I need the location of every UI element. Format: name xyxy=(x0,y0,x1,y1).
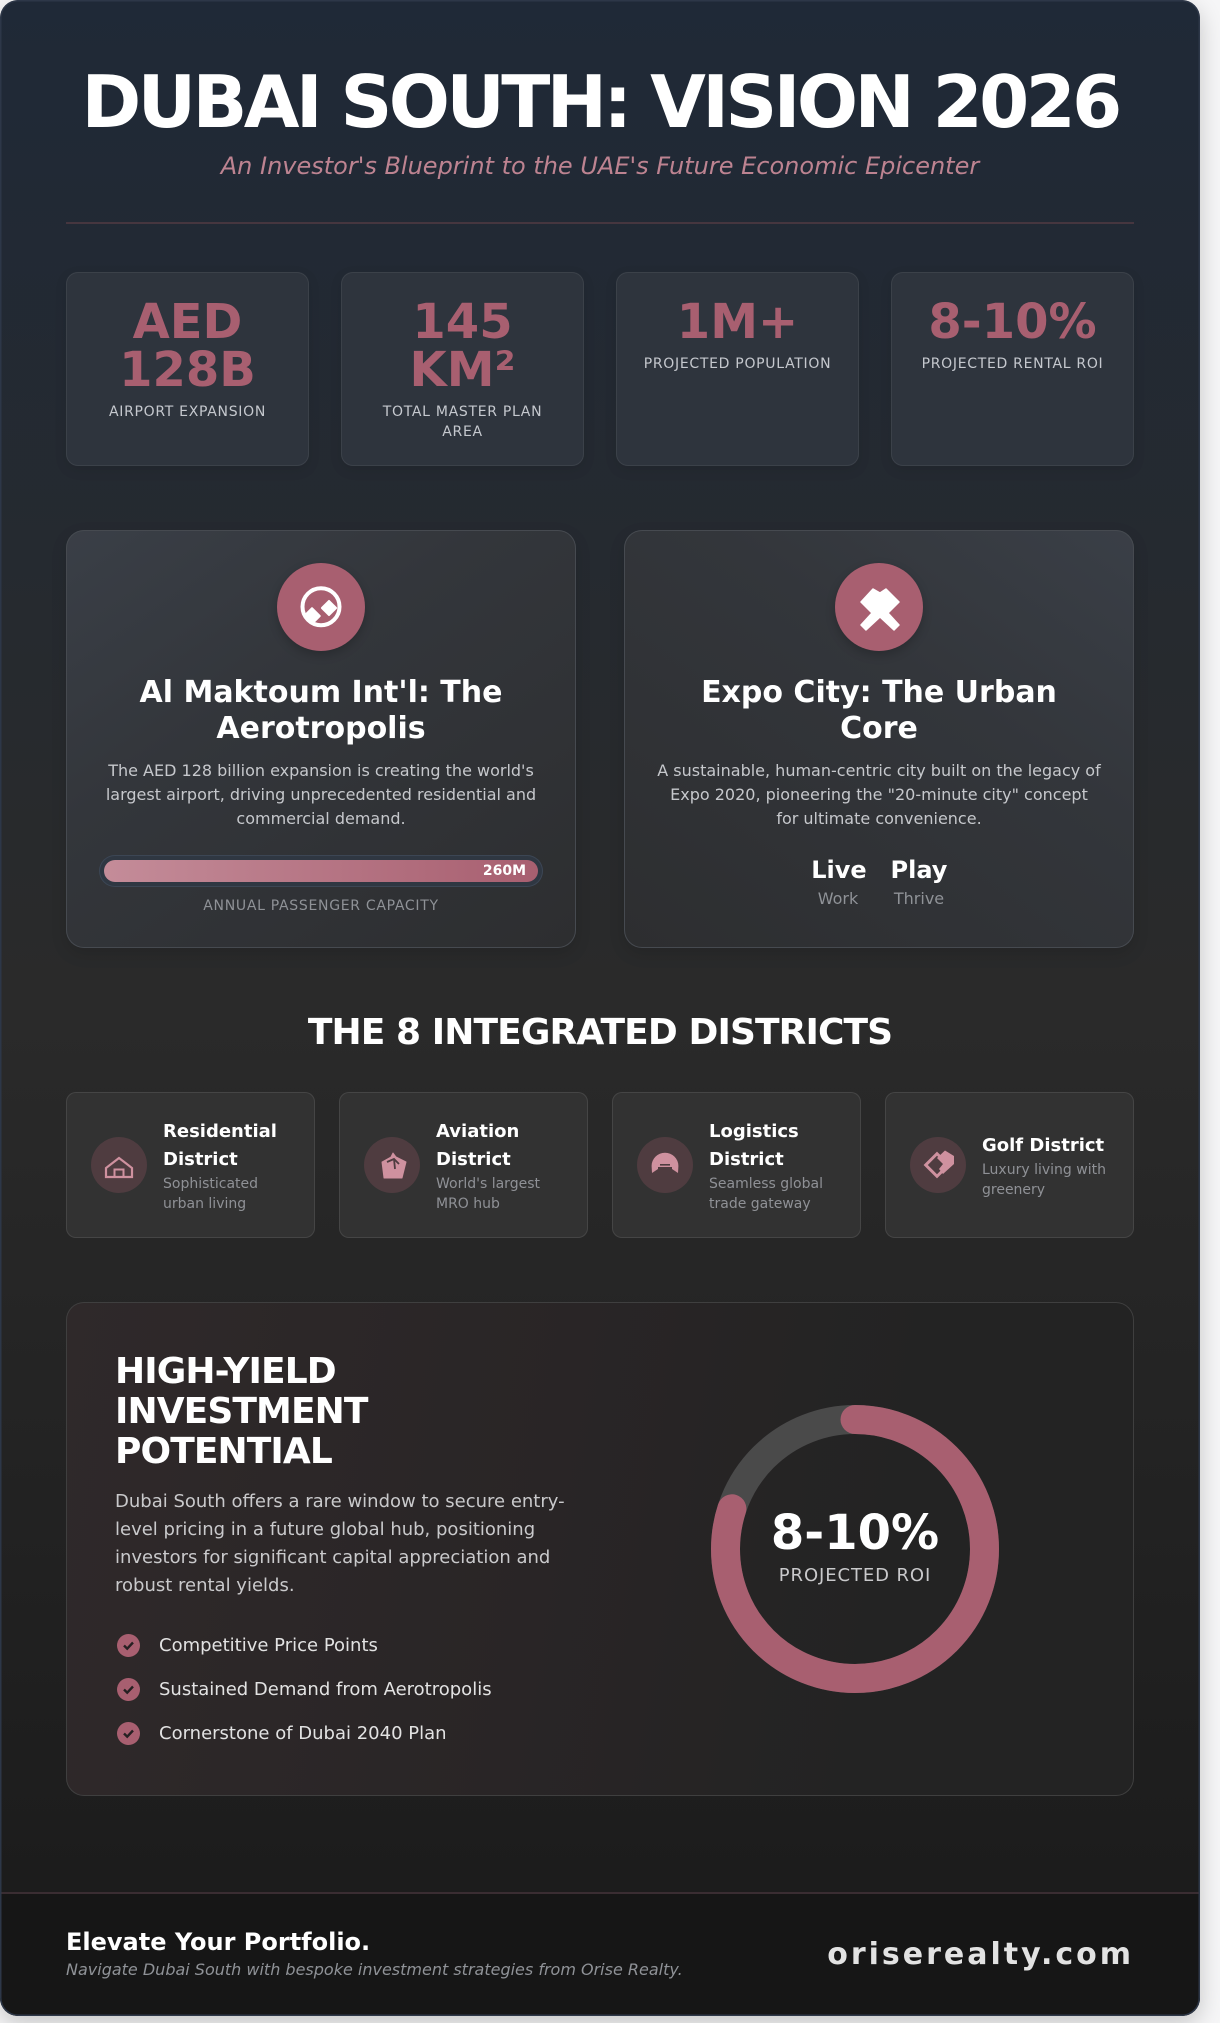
district card: residential: urban living xyxy=(163,1196,246,1212)
benefit: price points: Competitive Price Points xyxy=(159,1635,378,1656)
description xyxy=(657,761,1102,828)
stat card: airport expansion: 128B xyxy=(119,342,256,398)
description: Expo 2020, pioneering the "20-minute city" concept xyxy=(670,785,1088,804)
district card: residential xyxy=(66,1092,315,1238)
heading xyxy=(701,675,1057,746)
heading xyxy=(115,1351,368,1472)
district card: logistics: trade gateway xyxy=(709,1196,811,1212)
donut chart: projected ROI: PROJECTED ROI xyxy=(779,1565,931,1586)
stat card: master plan area: TOTAL MASTER PLAN xyxy=(383,404,542,420)
description: level pricing in a future global hub, positioning xyxy=(115,1519,535,1540)
stat card: master plan area: AREA xyxy=(442,424,483,440)
panel: investment potential xyxy=(66,1302,1134,1796)
description: A sustainable, human-centric city built on the legacy of xyxy=(657,761,1101,780)
stat card: master plan area: 145 xyxy=(412,294,513,350)
icon: house xyxy=(91,1137,147,1193)
district card: logistics: Seamless global xyxy=(709,1176,823,1192)
heading xyxy=(140,675,502,746)
call to action: Elevate Your Portfolio. xyxy=(66,1928,370,1956)
play and thrive: Play xyxy=(891,856,947,884)
tagline: Navigate Dubai South with bespoke investment strategies from Orise Realty. xyxy=(66,1960,683,1979)
description: investors for significant capital appreciation and xyxy=(115,1547,550,1568)
district card: logistics: Logistics xyxy=(709,1121,799,1142)
description: for ultimate convenience. xyxy=(776,809,982,828)
icon: crossed tools xyxy=(835,563,923,651)
heading: Aerotropolis xyxy=(216,711,426,746)
live and work xyxy=(811,856,867,908)
live and work: Live xyxy=(811,856,867,884)
icon: logistics xyxy=(637,1137,693,1193)
stat card: master plan area xyxy=(341,272,584,466)
district card: aviation: MRO hub xyxy=(436,1196,500,1212)
bar label: ANNUAL PASSENGER CAPACITY xyxy=(203,898,439,914)
district card: aviation: District xyxy=(436,1149,511,1170)
district card: golf xyxy=(885,1092,1134,1238)
description: largest airport, driving unprecedented residential and xyxy=(106,785,536,804)
heading: POTENTIAL xyxy=(115,1431,332,1472)
section heading: districts: THE 8 INTEGRATED DISTRICTS xyxy=(308,1012,892,1053)
stat card: rental ROI: 8-10% xyxy=(928,294,1097,350)
icon: aviation xyxy=(364,1137,420,1193)
district card: aviation: Aviation xyxy=(436,1121,519,1142)
panel: Al Maktoum airport xyxy=(66,530,576,948)
district card: logistics xyxy=(612,1092,861,1238)
heading: Expo City: The Urban xyxy=(701,675,1057,710)
panel: Expo City xyxy=(624,530,1134,948)
district card: aviation: World's largest xyxy=(436,1176,540,1192)
district card: golf: Golf District xyxy=(982,1135,1104,1156)
play and thrive: Thrive xyxy=(894,889,944,908)
capacity progress bar xyxy=(99,855,543,887)
district card: residential: Sophisticated xyxy=(163,1176,258,1192)
stat card: population: PROJECTED POPULATION xyxy=(644,356,831,372)
heading: Core xyxy=(840,711,918,746)
district card: residential: District xyxy=(163,1149,238,1170)
heading: INVESTMENT xyxy=(115,1391,368,1432)
district card: residential: Residential xyxy=(163,1121,277,1142)
stat card: airport expansion: AIRPORT EXPANSION xyxy=(109,404,266,420)
district card: aviation xyxy=(339,1092,588,1238)
footer xyxy=(0,1892,1200,2016)
title: DUBAI SOUTH: VISION 2026 xyxy=(81,60,1119,144)
heading: HIGH-YIELD xyxy=(115,1351,336,1392)
stat card: population xyxy=(616,272,859,466)
stat card: airport expansion: AED xyxy=(133,294,242,350)
description: robust rental yields. xyxy=(115,1575,295,1596)
description xyxy=(106,761,536,828)
stat card: rental ROI xyxy=(891,272,1134,466)
stat card: population: 1M+ xyxy=(677,294,798,350)
capacity progress bar: 260M xyxy=(483,863,526,879)
district card: golf: Luxury living with xyxy=(982,1162,1106,1178)
donut chart: projected ROI: 8-10% xyxy=(771,1505,939,1561)
benefit: dubai 2040 plan: Cornerstone of Dubai 2040 Plan xyxy=(159,1723,447,1744)
subtitle: An Investor's Blueprint to the UAE's Future Economic Epicenter xyxy=(221,152,979,180)
description: The AED 128 billion expansion is creating the world's xyxy=(108,761,534,780)
live and work: Work xyxy=(818,889,858,908)
description: commercial demand. xyxy=(236,809,406,828)
stat card: rental ROI: PROJECTED RENTAL ROI xyxy=(922,356,1103,372)
district card: golf: greenery xyxy=(982,1182,1045,1198)
description: Dubai South offers a rare window to secure entry- xyxy=(115,1491,565,1512)
stat card: master plan area: KM² xyxy=(410,342,515,398)
website: oriserealty.com xyxy=(827,1937,1134,1972)
play and thrive xyxy=(891,856,947,908)
stat card: airport expansion xyxy=(66,272,309,466)
icon: globe xyxy=(277,563,365,651)
description xyxy=(115,1491,565,1596)
heading: Al Maktoum Int'l: The xyxy=(140,675,502,710)
donut chart: projected ROI xyxy=(711,1405,999,1693)
district card: logistics: District xyxy=(709,1149,784,1170)
benefit: sustained demand: Sustained Demand from Aerotropolis xyxy=(159,1679,492,1700)
icon: golf xyxy=(910,1137,966,1193)
